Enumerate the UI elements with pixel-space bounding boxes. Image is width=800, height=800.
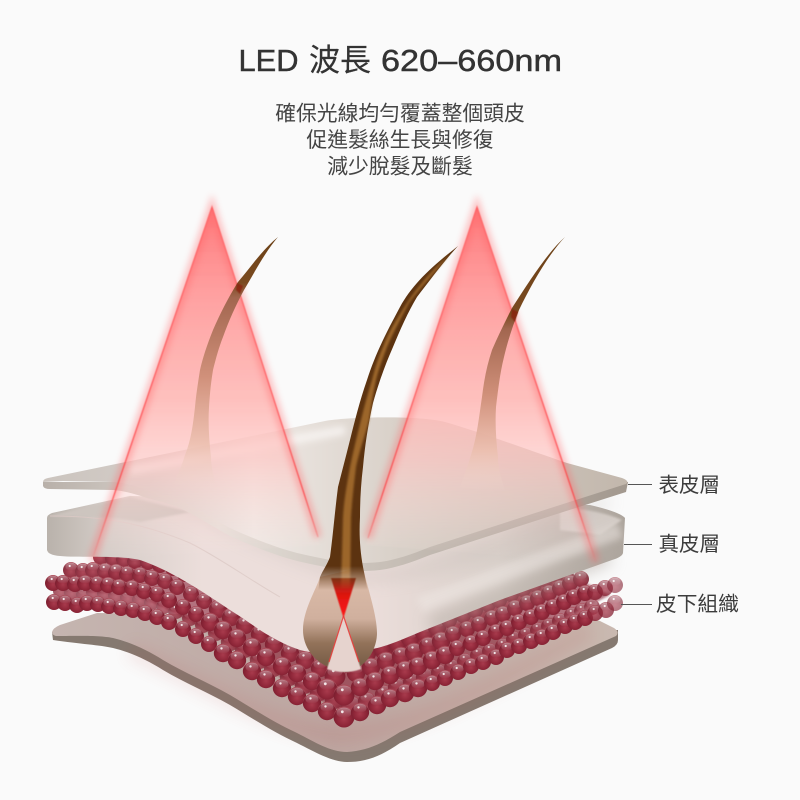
red light beam left (92, 207, 320, 560)
light passing through bulb (327, 616, 361, 672)
hair follicle bulb (303, 567, 377, 672)
label: dermis (624, 533, 720, 556)
title: 波長 (309, 43, 371, 78)
red crossing beam (331, 578, 356, 618)
dark red underlay behind beads (60, 565, 610, 712)
label: dermis: 真皮層 (658, 533, 720, 556)
lower bead strand (46, 594, 623, 728)
label: subcutaneous tissue: 皮下組織 (656, 593, 739, 616)
hidden lower row filling the gap between strands (53, 583, 600, 716)
title: 620–660nm (381, 43, 562, 78)
panel: base plate of subcutaneous layer (52, 613, 618, 762)
back bead rows (63, 541, 589, 686)
right side hair (460, 237, 565, 494)
label: epidermis: 表皮層 (658, 474, 720, 497)
title (238, 43, 562, 78)
centre hair shaft (318, 246, 458, 592)
title: LED (238, 43, 298, 78)
panel: epidermis layer (43, 417, 628, 571)
description text (275, 102, 525, 178)
panel: subcutaneous bead layer (45, 541, 623, 728)
description text: 確保光線均勻覆蓋整個頭皮 (275, 102, 525, 126)
upper bead strand (45, 575, 623, 706)
description text: 減少脫髮及斷髮 (327, 156, 473, 178)
description text: 促進髮絲生長與修復 (306, 129, 494, 152)
label: epidermis (628, 474, 720, 497)
left side hair (174, 237, 278, 492)
panel: dermis layer (47, 490, 625, 654)
red light beam right (366, 207, 596, 562)
